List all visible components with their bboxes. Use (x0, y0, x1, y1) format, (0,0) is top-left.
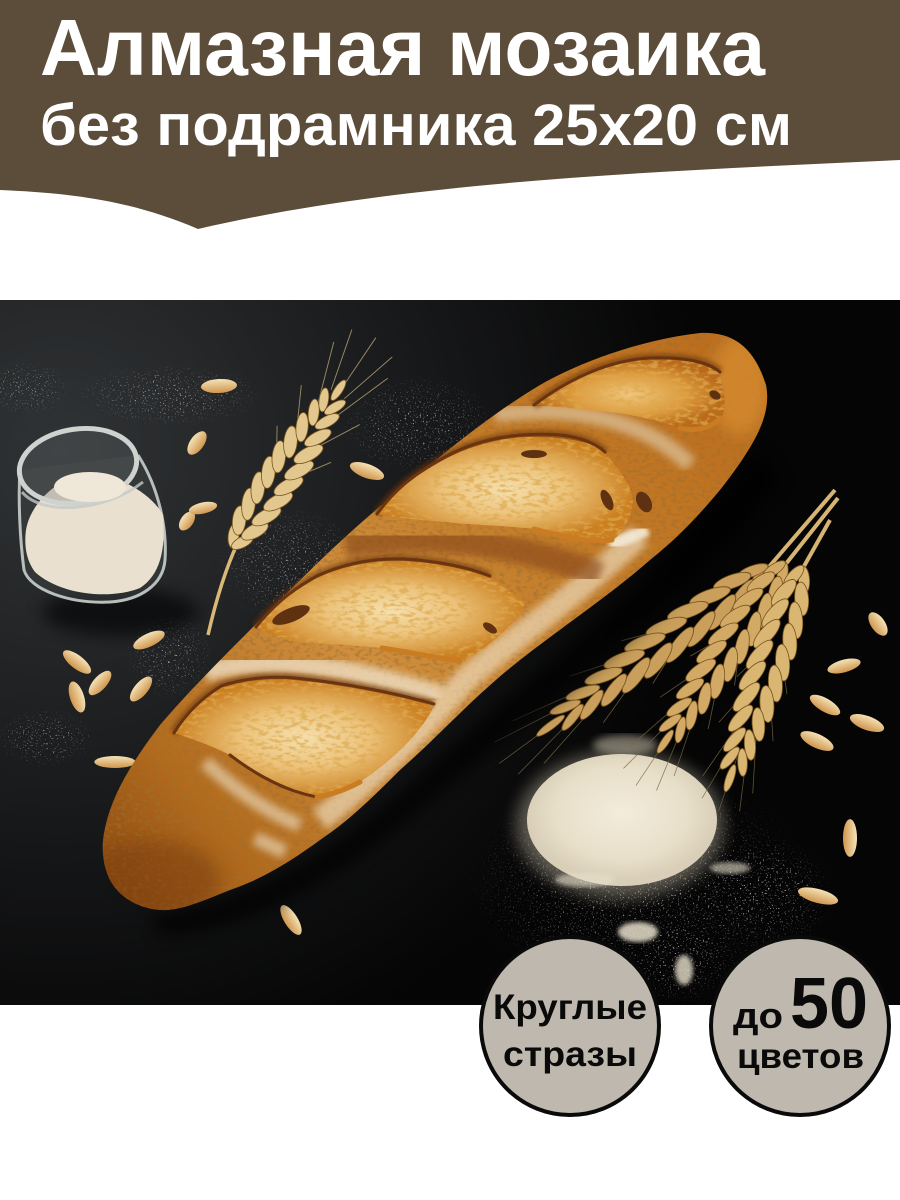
hole (481, 620, 499, 636)
lower edge flour streak (320, 535, 640, 820)
subtitle: без подрамника 25х20 см (40, 93, 792, 158)
jar body (19, 455, 165, 602)
end shading (103, 838, 222, 910)
awns A (494, 634, 666, 774)
jar shadow (42, 588, 198, 636)
wheat ear left (208, 318, 405, 635)
badge number: 50 (790, 964, 868, 1044)
title: Алмазная мозаика (40, 3, 765, 92)
glass jar with flour (14, 421, 198, 636)
tip glow (710, 335, 770, 435)
flour clump (710, 862, 750, 874)
pile body (527, 754, 717, 886)
loose grains (59, 378, 891, 938)
scattered flour dust (0, 360, 835, 1005)
lower crust band flour (205, 663, 440, 695)
baguette body (103, 333, 767, 910)
crumb glow edge (317, 418, 720, 797)
badge circle (481, 937, 659, 1115)
wheat bundle right (483, 490, 838, 985)
badge text line 2: стразы (503, 1035, 637, 1074)
hole (708, 389, 722, 401)
badge text line 1: Круглые (493, 988, 647, 1027)
slash 2 (377, 437, 633, 542)
awns B (623, 645, 738, 791)
ear B (656, 560, 789, 754)
badge circle (711, 937, 889, 1115)
pile halo (516, 751, 724, 899)
flour seen through opening (54, 472, 126, 502)
banner background shape (0, 0, 900, 229)
slash 3 (256, 561, 525, 661)
flour clump (618, 922, 658, 942)
badge text: цветов: цветов (737, 1037, 864, 1076)
baguette (80, 330, 780, 935)
stems (768, 490, 838, 568)
slash 4 (174, 679, 434, 797)
hole (598, 488, 616, 512)
ear C (720, 564, 810, 792)
top crust band flour (495, 412, 690, 465)
hole (521, 450, 547, 458)
baguette shadow (160, 608, 678, 930)
end flour patches (205, 762, 300, 852)
flour patch (610, 530, 648, 545)
ear A (536, 563, 769, 737)
crust pores (100, 330, 775, 915)
top spill (593, 735, 657, 755)
slash dark lips (174, 358, 720, 797)
badge text: до: до (733, 995, 783, 1036)
awns (276, 330, 392, 472)
hole (270, 601, 312, 629)
slash lip shadows (174, 358, 720, 733)
header banner (0, 0, 900, 229)
crust details (80, 330, 775, 920)
jar neck highlight (22, 482, 143, 508)
middle crust band (345, 539, 600, 575)
awns C (702, 667, 788, 812)
jar rim (16, 426, 140, 506)
crumb holes (270, 389, 722, 636)
stem (208, 542, 238, 635)
photo: baguette on dark table (0, 300, 900, 1005)
badge: round rhinestones (481, 937, 659, 1115)
flour clump (555, 873, 615, 887)
flour in jar (25, 472, 164, 594)
flour pile (516, 735, 750, 985)
crumb fibres (174, 359, 725, 797)
flour clump (675, 955, 693, 985)
hole (633, 489, 655, 515)
grains (228, 380, 346, 550)
badge: up to 50 colors (711, 937, 889, 1115)
table background (0, 300, 900, 1005)
slash 1 (534, 359, 725, 430)
